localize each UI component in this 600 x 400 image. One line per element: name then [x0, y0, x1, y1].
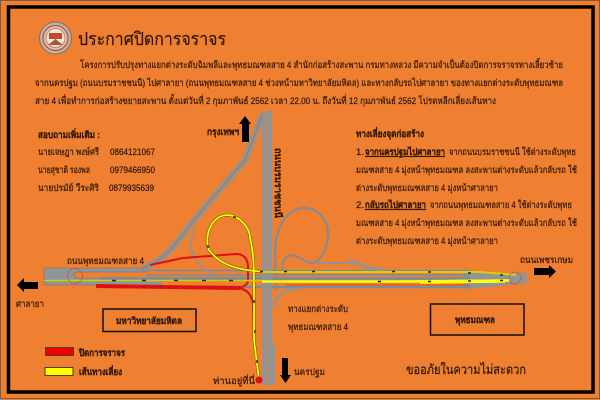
label: Phutthamonthon Sai 4 road: ถนนพุทธมณฑลสาย 4: [67, 256, 144, 267]
detour route yellow: [44, 215, 516, 380]
road map: [44, 111, 527, 385]
label: Bangkok: กรุงเทพฯ: [207, 127, 239, 138]
label: you are here: ท่านอยู่ที่นี่: [213, 374, 255, 387]
horizontal main lines: [100, 270, 470, 287]
intro paragraph: [35, 58, 563, 107]
detour instructions: กลับรถไปศาลายา: [365, 199, 426, 211]
box: Phutthamonthon: [430, 304, 524, 335]
north-west ramp: [143, 113, 263, 268]
detour instructions: [356, 126, 577, 247]
contact information: สอบถามเพิ่มเติม :: [38, 127, 100, 141]
detour instructions: จากนครปฐมไปศาลายา: [365, 146, 445, 158]
road end markers: [68, 268, 521, 284]
detour instructions: 2.: [356, 200, 364, 211]
contact information: นายสุชาติ รองพล: [38, 165, 90, 176]
contact information: นายปรมัย์ วีระศิริ: [38, 182, 99, 194]
icon: department seal: [40, 22, 72, 54]
legend: road closed: ปิดการจราจร: [78, 347, 126, 359]
arrow: to Salaya: [17, 278, 38, 292]
label: interchange name: [288, 304, 348, 333]
label: Nakhon Pathom: นครปฐม: [294, 367, 325, 378]
east road taper: [463, 272, 527, 289]
legend: [45, 347, 126, 378]
label: interchange name: พุทธมณฑลสาย 4: [288, 322, 348, 333]
east grey ramp: [314, 262, 358, 264]
detour instructions: ทางเลี่ยงจุดก่อสร้าง: [356, 126, 424, 140]
vertical main road: [262, 111, 266, 385]
intro paragraph: สาย 4 เพื่อทำการก่อสร้างขยายสะพาน ตั้งแต่วันที่ 2 กุมภาพันธ์ 2562 เวลา 22.00 น. ถึงวันที่ 12 กุมภาพันธ์ 2562 โปรดหลีกเลี่ยงเส้นทาง: [35, 94, 496, 107]
east grey cloverleaf loop: [275, 208, 328, 290]
label: Phetkasem road: ถนนเพชรเกษม: [520, 255, 573, 266]
box: Mahidol University: [103, 309, 196, 332]
detour instructions: ต่างระดับพุทธมณฑลสาย 4 มุ่งหน้าศาลายา: [356, 183, 498, 194]
detour instructions: ต่างระดับพุทธมณฑลสาย 4 มุ่งหน้าศาลายา: [356, 236, 498, 247]
label: interchange name: ทางแยกต่างระดับ: [288, 304, 348, 315]
south-east ramp: [275, 288, 300, 307]
icon: current location marker: [256, 376, 262, 384]
title: ประกาศปิดการจราจร: [78, 29, 226, 49]
detour instructions: 1.: [356, 147, 364, 158]
route markers: [112, 217, 503, 363]
arrow: to Phetkasem: [534, 265, 556, 278]
apology note: ขออภัยในความไม่สะดวก: [406, 361, 526, 377]
contact information: 0879935639: [109, 183, 154, 194]
contact information: [38, 127, 155, 194]
arrow: to Bangkok: [239, 116, 251, 142]
closed road segments: [96, 254, 254, 343]
label: Borommaratchachonnani road: ถนนบรมราชชนนี: [272, 148, 284, 218]
label: Salaya: ศาลายา: [16, 299, 44, 310]
legend: detour route: เส้นทางเลี่ยง: [79, 364, 122, 378]
contact information: 0979466950: [110, 165, 155, 176]
box: Mahidol University: มหาวิทยาลัยมหิดล: [116, 316, 182, 327]
west grey loop: [191, 231, 213, 274]
arrow: to Nakhon Pathom: [280, 358, 291, 383]
contact information: 0864121067: [110, 147, 155, 158]
west road end: [44, 268, 162, 285]
contact information: นายเจษฎา พงษ์ศรี: [38, 146, 99, 158]
box: Phutthamonthon: พุทธมณฑล: [455, 315, 495, 326]
